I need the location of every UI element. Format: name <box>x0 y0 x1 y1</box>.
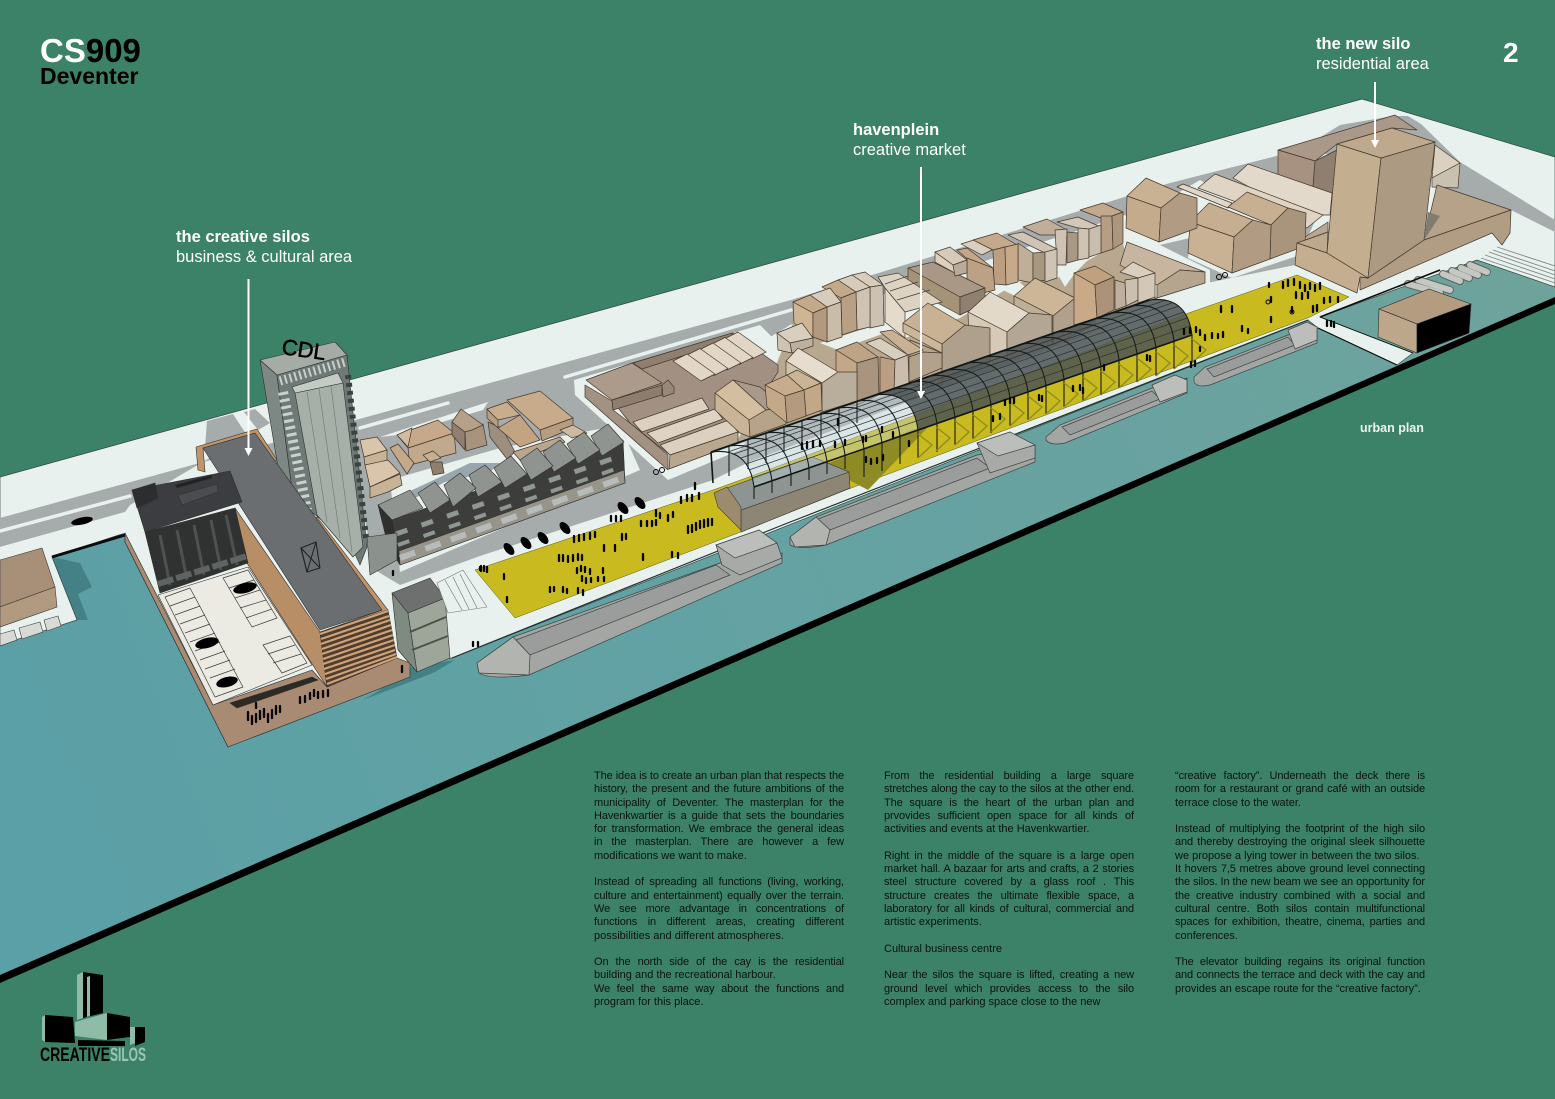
moored small boats <box>1408 265 1487 293</box>
parking terrace <box>158 567 318 708</box>
title <box>40 32 141 89</box>
text column 2: From the residential building a large square <box>884 770 1134 782</box>
large flat block <box>487 391 587 460</box>
text column 3: the creative industry combined with a social and <box>1175 890 1425 902</box>
text column 1: possibilities and different atmospheres. <box>594 930 784 942</box>
large house 1 <box>903 303 990 385</box>
dark glass roof <box>875 299 1192 430</box>
harbour dock dark edges <box>52 270 1440 557</box>
text column 3: The elevator building regains its original function <box>1175 956 1425 968</box>
label: havenplein: creative market <box>853 141 966 159</box>
left harbour block <box>0 548 61 646</box>
inner silo <box>292 373 363 557</box>
quay edge <box>452 320 1308 658</box>
text column 1: functions in different areas, creating different <box>594 916 844 928</box>
barge 3 <box>1046 375 1187 444</box>
back row boxes <box>908 203 1123 315</box>
label: the creative silos: business & cultural area <box>176 248 353 266</box>
brown warehouse <box>0 548 57 627</box>
wide back house <box>1120 242 1205 298</box>
barge 4 <box>1194 322 1317 386</box>
text column 3: It hovers 7,5 metres above ground level connecting <box>1175 863 1425 875</box>
road medians and building pads <box>0 180 1297 572</box>
text column 1: program for this place. <box>594 996 703 1008</box>
beam end face <box>320 610 397 687</box>
roofed house <box>390 420 456 475</box>
small white house <box>777 323 813 353</box>
text column 3: spaces for exhibition, theatre, cinema, parties and <box>1175 916 1425 928</box>
buildings behind row houses <box>360 391 587 498</box>
page number: 2 <box>1503 37 1519 68</box>
light house 4 <box>786 348 857 413</box>
text column 3: the silos. In the new beam we see an opportunity for <box>1175 876 1425 888</box>
text column 2: The square is the heart of the urban plan and <box>884 797 1134 809</box>
text column 1: building and the recreational harbour. <box>594 969 776 981</box>
CDL roof sign: CDL <box>280 334 327 365</box>
barge 1 <box>477 530 782 677</box>
market hall stone block <box>714 457 850 532</box>
roof annex <box>586 333 732 410</box>
project place: Deventer <box>40 63 138 89</box>
central cluster backing mass <box>735 243 1157 445</box>
text column 2: structure creates the ultimate flexible space, a <box>884 890 1134 902</box>
logo icon <box>42 972 145 1046</box>
label: the new silo <box>1316 35 1430 73</box>
label: the new silo: residential area <box>1316 55 1430 73</box>
row houses <box>378 424 625 565</box>
text column 3: and connects the terrace and deck with the cay and <box>1175 969 1425 981</box>
text column 1: modifications we want to make. <box>594 850 747 862</box>
creative silos complex <box>125 334 487 747</box>
white courtyards in cluster <box>820 258 1090 350</box>
beam roof <box>203 433 382 630</box>
text column 1: Havenkwartier is a guide that sets the boundaries <box>594 810 844 822</box>
project code: CS909 <box>40 32 141 69</box>
text column 2: market hall. A bazaar for arts and crafts, a 2 stories <box>884 863 1134 875</box>
vault roofs <box>633 398 738 469</box>
building group: central cluster <box>777 203 1205 413</box>
text column 1: history, the present and the future ambitions of the <box>594 783 844 795</box>
roof cage <box>301 542 320 572</box>
beam edge trim <box>196 429 388 632</box>
facade <box>392 440 625 565</box>
text column 2: Near the silos the square is lifted, creating a new <box>884 969 1134 981</box>
text column 2 <box>884 770 1134 1008</box>
factory roof <box>612 333 778 455</box>
text column 2: prvovides sufficient open space for all kinds of <box>884 810 1134 822</box>
text column 2: steel structure covered by a glass roof . This <box>884 876 1134 888</box>
text column 2: laboratory for all kinds of cultural, commercial and <box>884 903 1134 915</box>
small boats <box>0 616 61 646</box>
text column 2: activities and events at the Havenkwartier. <box>884 823 1089 835</box>
building group: new silo area <box>1126 115 1511 293</box>
text column 3: Instead of multiplying the footprint of the high silo <box>1175 823 1425 835</box>
beam wooden long face <box>235 508 327 687</box>
light striped block <box>878 273 942 338</box>
text column 3: provides an escape route for the “creative factory”. <box>1175 983 1421 995</box>
label: the creative silos: the creative silos <box>176 228 310 246</box>
label: havenplein <box>853 121 966 159</box>
text column 1: We feel the same way about the functions and <box>594 983 844 995</box>
text column 1: On the north side of the cay is the residential <box>594 956 844 968</box>
label: the new silo: the new silo <box>1316 35 1410 53</box>
text column 2: complex and parking space close to the new <box>884 996 1100 1008</box>
column shadows on square <box>918 339 1206 458</box>
text column 1: municipality of Deventer. The masterplan for the <box>594 797 844 809</box>
shadows on water <box>52 557 455 700</box>
back columns <box>729 401 857 476</box>
cyclists <box>654 272 1294 474</box>
purlins <box>719 298 1190 478</box>
tall tan boxes <box>793 272 884 342</box>
text column 2: Right in the middle of the square is a large open <box>884 850 1134 862</box>
black base edge <box>0 297 1555 983</box>
text column 1: culture and entertainment) equally over the terrain. <box>594 890 844 902</box>
back and eave beams <box>711 300 1192 487</box>
mid-right boxes <box>1074 262 1155 325</box>
pad shadow <box>408 463 500 498</box>
roads <box>0 116 1555 585</box>
text column 3: and thereby destroying the original sleek silhouette <box>1175 836 1425 848</box>
gable house <box>1126 178 1197 242</box>
logo wordmark: CREATIVE <box>40 1045 110 1066</box>
saw-tooth sheds <box>673 332 766 381</box>
text column 1: for transformation. We embrace the general ideas <box>594 823 844 835</box>
logo: creative silos <box>40 972 146 1066</box>
elevator building <box>392 578 450 672</box>
lower boxes <box>836 330 942 405</box>
clear glass roof <box>711 394 918 487</box>
label: havenplein: havenplein <box>853 121 939 139</box>
label: urban plan: urban plan <box>1360 421 1424 435</box>
arrow: new silo <box>1371 82 1379 148</box>
text column 2: ground level which provides access to the silo <box>884 983 1134 995</box>
arrow: creative silos <box>244 279 252 456</box>
tan house 3 <box>1014 278 1095 345</box>
text column 3: cultural centre. Both silos contain multifunctional <box>1175 903 1425 915</box>
market square <box>475 275 1349 618</box>
brown block behind tower <box>1278 115 1460 195</box>
text column 1: in the masterplan. There are however a few <box>594 836 844 848</box>
label: the creative silos <box>176 228 353 266</box>
land plate <box>0 99 1555 747</box>
text column 2: artistic experiments. <box>884 916 982 928</box>
hall shadow on square <box>755 425 930 490</box>
text column 1: Instead of spreading all functions (living, working, <box>594 876 844 888</box>
text column 1: The idea is to create an urban plan that respects the <box>594 770 844 782</box>
cars <box>70 495 648 690</box>
text column 3 <box>1175 770 1425 995</box>
front houses <box>715 370 822 437</box>
factory body <box>585 385 668 470</box>
barge 2 <box>790 432 1035 548</box>
text column 2: Cultural business centre <box>884 943 1002 955</box>
people silhouettes <box>248 279 1338 724</box>
tall silo <box>260 342 397 575</box>
new silo tower <box>1295 128 1511 293</box>
logo wordmark: SILOS <box>110 1045 146 1066</box>
text column 3: we propose a lying tower in between the two silos. <box>1175 850 1420 862</box>
gable house <box>452 409 487 451</box>
text column 2: stretches along the cay to the silos at the other end. <box>884 783 1134 795</box>
text column 3: “creative factory”. Underneath the deck there is <box>1175 770 1425 782</box>
wooden deck <box>125 533 410 747</box>
light house 2 <box>968 292 1052 370</box>
left pale blocks <box>360 437 402 498</box>
text column 3: terrace close to the water. <box>1175 797 1301 809</box>
text column 1: We see more advantage in concentrations of <box>594 903 844 915</box>
text column 1 <box>594 770 844 1008</box>
beam end face stripes <box>320 611 397 684</box>
factory building <box>585 332 822 470</box>
twin houses <box>1188 192 1306 273</box>
text column 3: room for a restaurant or grand café with an outside <box>1175 783 1425 795</box>
barges <box>477 322 1317 677</box>
glass market hall <box>711 298 1206 499</box>
stripes at right quay <box>1481 247 1555 283</box>
ribs and columns <box>711 299 1192 499</box>
arrow: havenplein <box>917 167 925 399</box>
long light halls <box>1177 164 1332 243</box>
water basin <box>0 99 1555 978</box>
stair <box>437 570 487 613</box>
roofs <box>378 424 624 520</box>
text column 3: conferences. <box>1175 930 1238 942</box>
black dock building <box>1378 289 1471 353</box>
dark silo <box>132 471 248 593</box>
